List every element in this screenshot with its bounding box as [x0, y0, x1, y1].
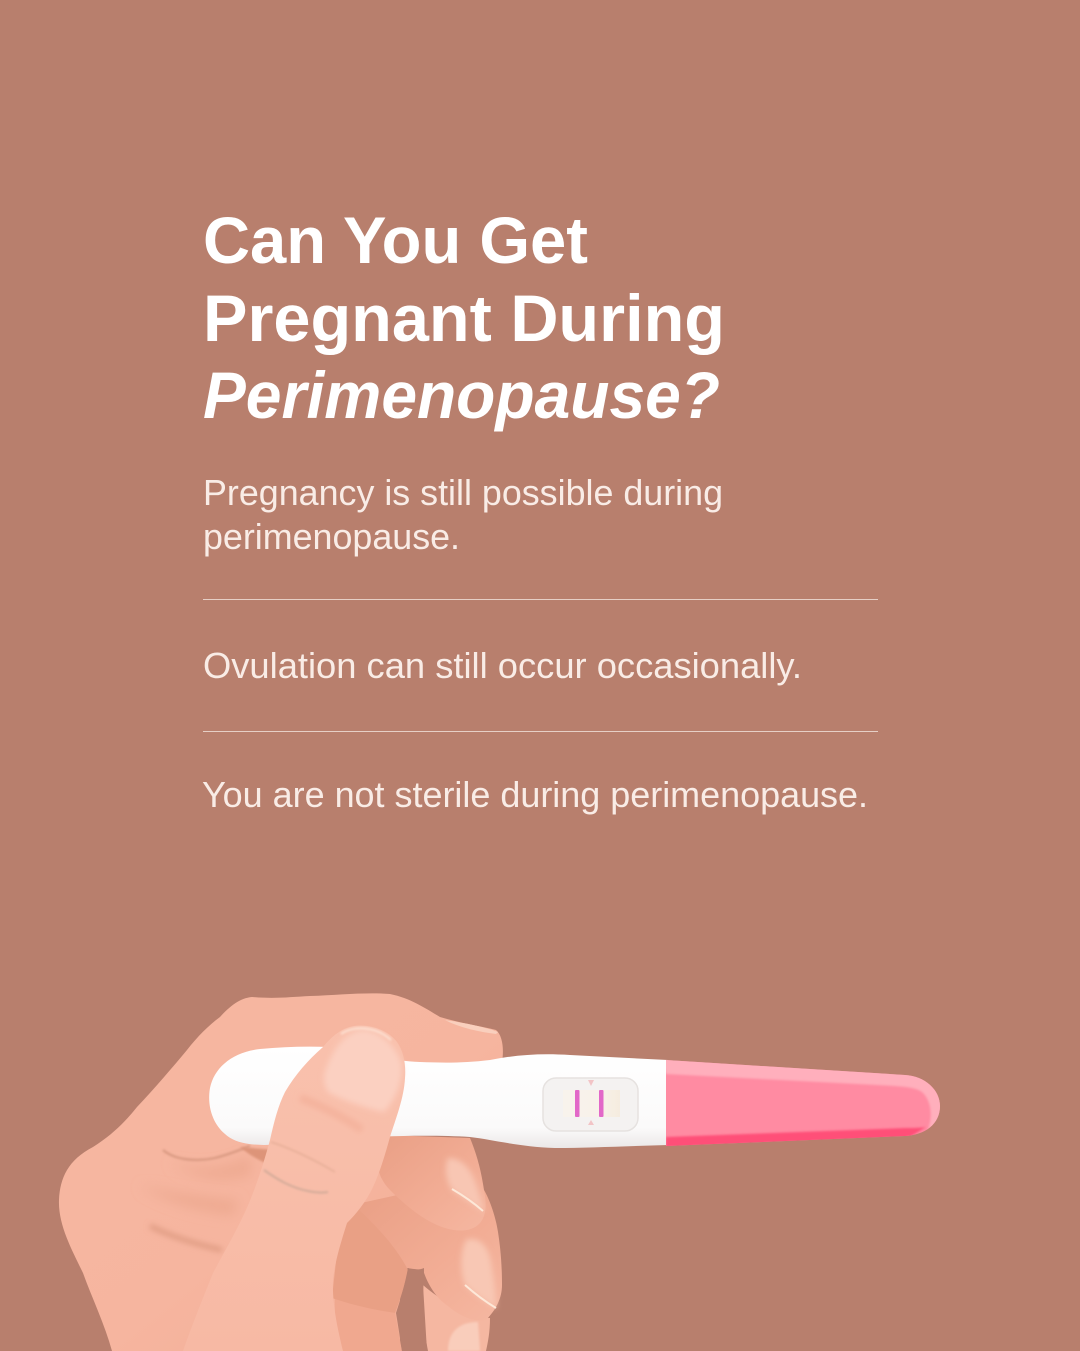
infographic canvas: [59, 217, 940, 1351]
hand: thumb in front of test: [183, 1026, 405, 1351]
text block: pregnancy still possible: [203, 472, 723, 557]
title: Pregnant During: [203, 281, 725, 355]
test lines: two positive lines: [575, 1090, 604, 1117]
test: white body: [209, 1047, 668, 1148]
index finger below test: [378, 1135, 486, 1231]
fingernail: ring finger: [448, 1322, 480, 1351]
palm below thumb: [335, 1298, 402, 1351]
cap lower shadow: [666, 1126, 925, 1146]
cap highlight: [666, 1060, 940, 1130]
ring finger, bottom right: [423, 1285, 490, 1351]
text block: ovulation: Ovulation can still occur occasionally.: [203, 645, 802, 686]
fingernail: middle finger: [461, 1239, 496, 1308]
text block: pregnancy still possible: perimenopause.: [203, 516, 460, 557]
palm creases and soft shading: [140, 1146, 275, 1250]
hand: palm and index finger behind test: [59, 993, 503, 1351]
title: Perimenopause?: [203, 358, 720, 432]
gap between fingers: [396, 1268, 428, 1351]
title: Can You Get: [203, 203, 588, 277]
middle finger: [352, 1190, 502, 1320]
test: result window: [543, 1078, 638, 1131]
text block: not sterile: You are not sterile during perimenopause.: [202, 774, 868, 815]
text block: pregnancy still possible: Pregnancy is still possible during: [203, 472, 723, 513]
title: [203, 203, 725, 432]
test: pink cap: [666, 1060, 940, 1146]
illustration: hand holding pregnancy test: [59, 993, 950, 1351]
fingernail: index finger: [446, 1158, 484, 1212]
fingertip nail edge: [445, 1020, 498, 1034]
thumbnail: [324, 1030, 402, 1112]
thumb knuckle creases: [271, 1142, 335, 1172]
